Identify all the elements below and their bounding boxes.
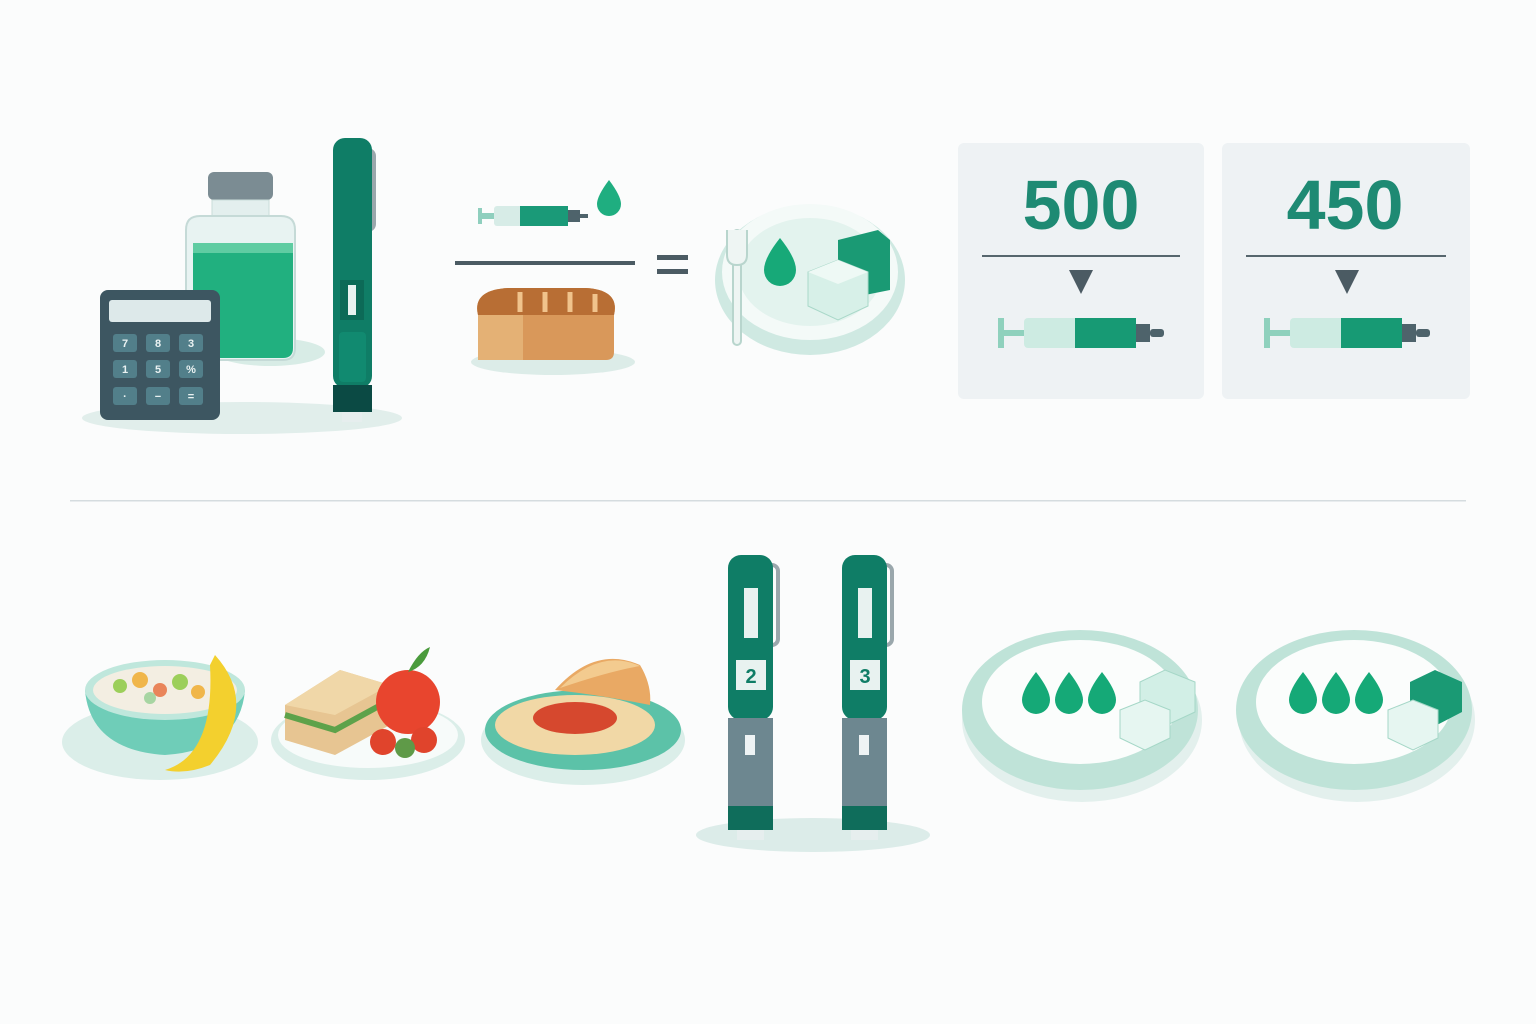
panel: 450 rule: 450 (1287, 166, 1403, 244)
icon: plate with drop and sugar cube (715, 204, 905, 355)
icon: pasta plate with bread (481, 659, 685, 785)
icon: calculator: 8 (155, 338, 161, 350)
panel: 500 rule (958, 143, 1204, 399)
icon: calculator (100, 290, 220, 420)
icon: calculator: % (186, 364, 196, 376)
icon: pen 2: 2 (745, 666, 757, 688)
icon: calculator: 1 (122, 364, 128, 376)
icon: drop (597, 180, 621, 216)
icon: pen 3 (842, 555, 892, 840)
fraction: syringe over bread (455, 180, 635, 375)
icon: pen 2 (728, 555, 778, 840)
group: calculator, vial and pen (82, 138, 402, 434)
icon: calculator: 5 (155, 364, 161, 376)
icon: pen 3: 3 (859, 666, 871, 688)
icon: calculator: 3 (188, 338, 194, 350)
icon: sandwich plate with apple (271, 647, 465, 780)
icon: bread (471, 288, 635, 375)
icon: syringe (1264, 318, 1430, 348)
icon: syringe (998, 318, 1164, 348)
group: two insulin pens (696, 555, 930, 852)
icon: cereal bowl with banana (62, 655, 258, 780)
equals sign (657, 255, 688, 274)
panel: 450 rule (1222, 143, 1470, 399)
icon: syringe small (478, 206, 588, 226)
icon: calculator: = (188, 391, 194, 403)
icon: calculator: 7 (122, 338, 128, 350)
icon: calculator: · (123, 391, 127, 403)
icon: plate with three drops and cubes (1) (962, 630, 1202, 802)
panel: 500 rule: 500 (1023, 166, 1139, 244)
icon: calculator: − (155, 391, 161, 403)
icon: plate with three drops and cubes (2) (1236, 630, 1475, 802)
icon: insulin pen (333, 138, 374, 422)
icon: vial (186, 172, 295, 360)
